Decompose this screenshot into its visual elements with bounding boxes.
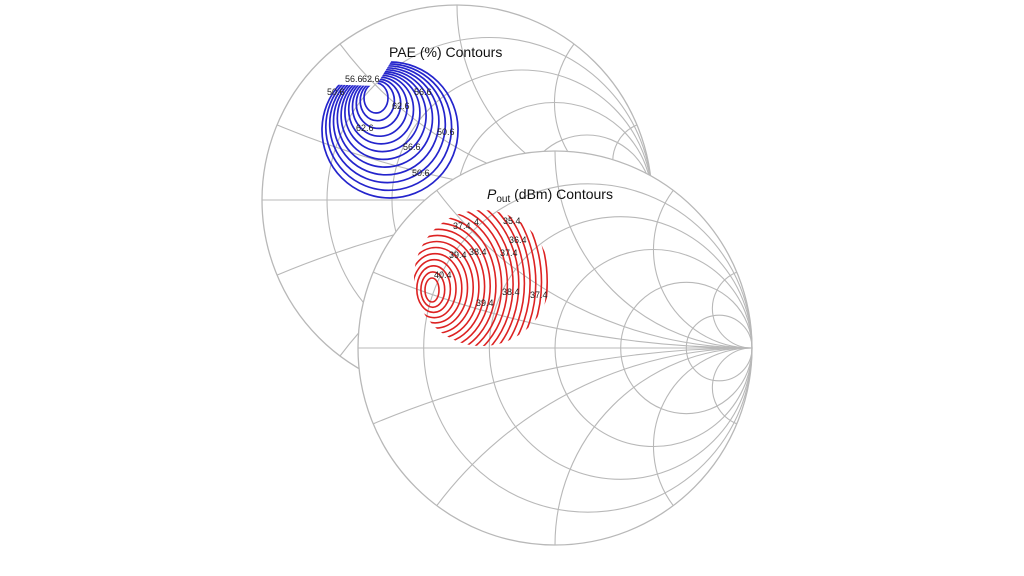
PAE labels: 56.6 [345, 74, 363, 84]
Pout labels: 4 [474, 217, 479, 227]
smith chart: Pout (front) [330, 138, 752, 545]
PAE contours [322, 62, 458, 198]
Pout labels: 38.4 [502, 287, 520, 297]
PAE labels: 62.6 [392, 101, 410, 111]
Pout labels: 39.4 [449, 250, 467, 260]
title: PAE: PAE (%) Contours [389, 44, 502, 60]
Pout labels: 40.4 [434, 270, 452, 280]
PAE labels: 50.6 [437, 127, 455, 137]
title: Pout: out [496, 194, 510, 205]
Pout labels: 37.4 [530, 290, 548, 300]
PAE labels: 56.6 [403, 142, 421, 152]
Pout labels: 37.4 [453, 221, 471, 231]
Pout labels: 38.4 [469, 247, 487, 257]
Pout contours [414, 210, 548, 346]
Pout labels: 37.4 [500, 248, 518, 258]
title: Pout: (dBm) Contours [510, 186, 613, 202]
PAE labels: 62.6 [356, 123, 374, 133]
PAE labels: 50.6 [412, 168, 430, 178]
PAE labels: 50.6 [327, 87, 345, 97]
PAE labels: 62.6 [362, 74, 380, 84]
smith chart: PAE (back) [262, 5, 652, 395]
Pout labels: 39.4 [476, 298, 494, 308]
Pout labels: 36.4 [509, 235, 527, 245]
PAE labels: 56.6 [414, 87, 432, 97]
PAE labels [327, 74, 455, 178]
title: Pout: P [487, 186, 497, 202]
Pout labels: 35.4 [503, 216, 521, 226]
Pout labels [434, 216, 548, 308]
